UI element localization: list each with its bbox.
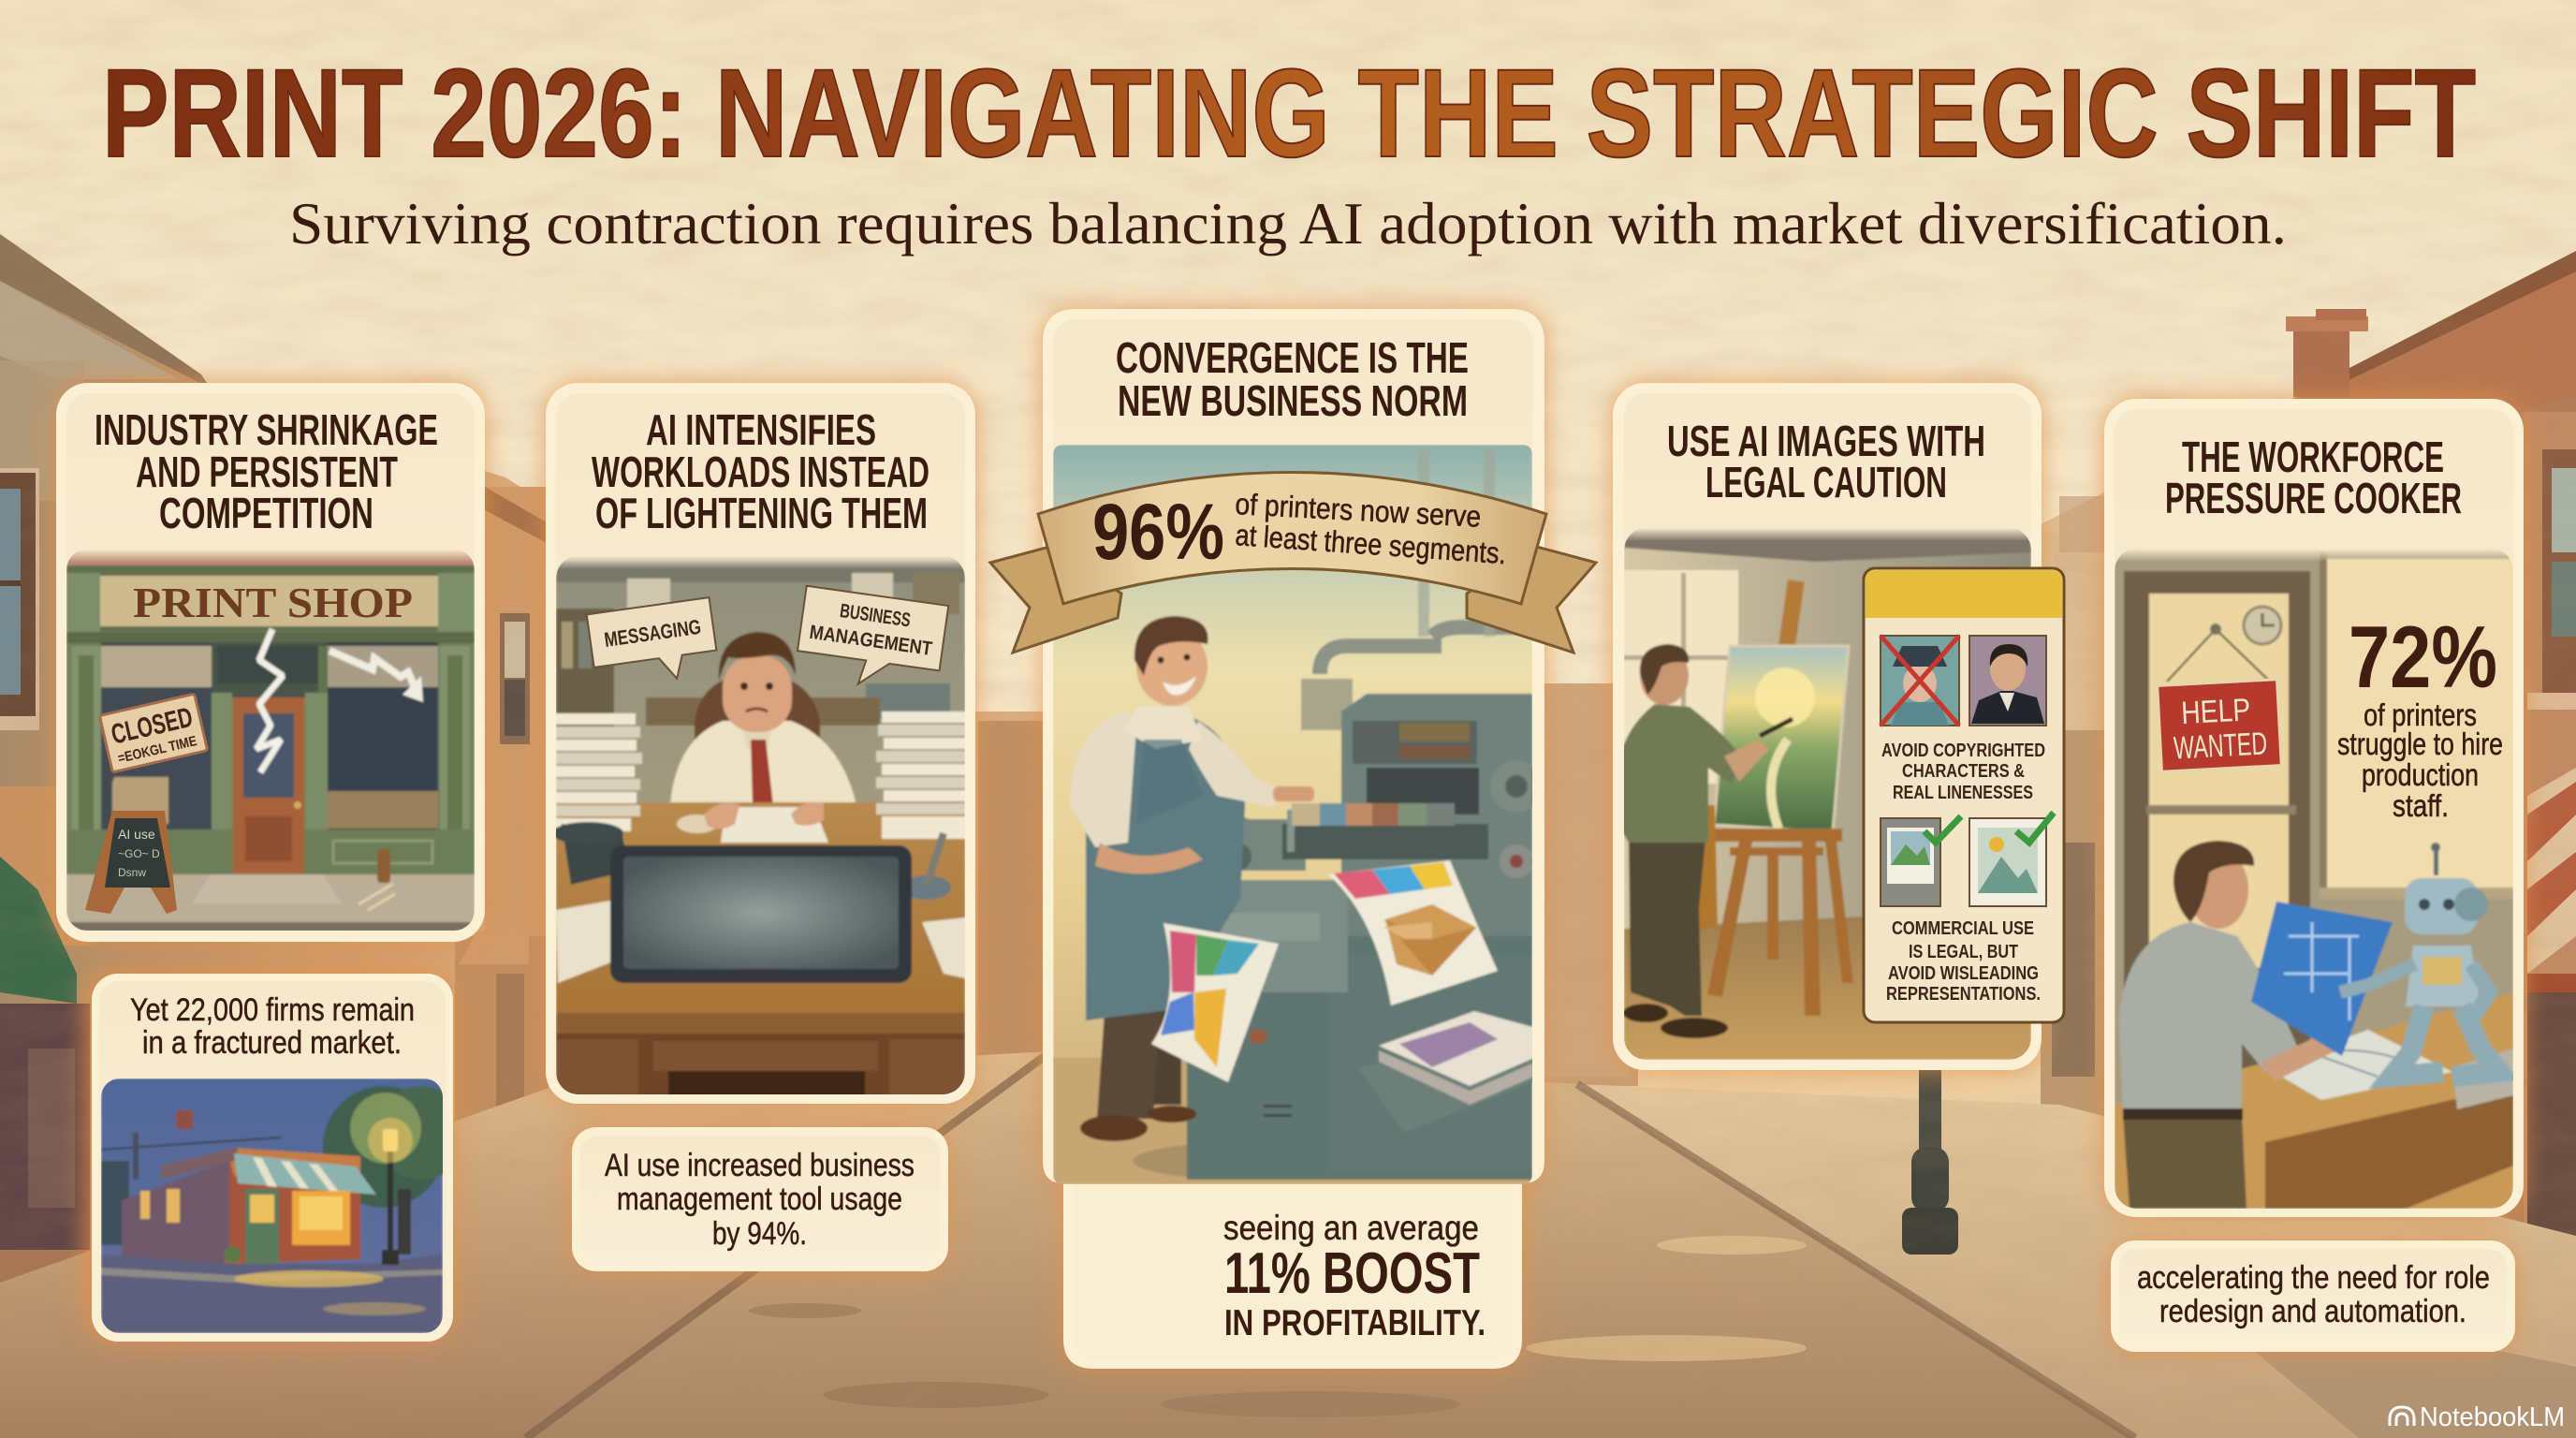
street and sidewalks bbox=[0, 1051, 2576, 1438]
right window and awning bbox=[2527, 449, 2576, 1236]
stat: 72 percent: of printers bbox=[2364, 697, 2477, 732]
card text: Yet 22,000 firms remain bbox=[130, 992, 415, 1028]
banner: 96% statistic bbox=[990, 472, 1596, 653]
panel heading: WORKLOADS INSTEAD bbox=[592, 448, 929, 496]
stat: 72 percent: staff. bbox=[2393, 788, 2449, 823]
sandwich board: AI use bbox=[118, 827, 155, 842]
sign: closed bbox=[99, 694, 208, 772]
illustration: evening storefront bbox=[101, 1078, 468, 1333]
illustration: worker with blueprint and robot bbox=[2115, 549, 2513, 1209]
profitability text: IN PROFITABILITY. bbox=[1224, 1303, 1486, 1343]
panel: legal caution bbox=[1613, 383, 2064, 1070]
panel heading: CONVERGENCE IS THE bbox=[1116, 333, 1469, 382]
right building bbox=[2041, 251, 2576, 1245]
sandwich board: Dsnw bbox=[118, 866, 146, 879]
speech bubble: business management: BUSINESS bbox=[839, 600, 912, 631]
caption: role redesign: accelerating the need for role bbox=[2137, 1260, 2490, 1296]
rules text: avoid bbox=[1881, 741, 2045, 803]
speech bubble: messaging: MESSAGING bbox=[603, 615, 702, 652]
panel: AI intensifies workloads bbox=[546, 383, 975, 1104]
panel heading: AND PERSISTENT bbox=[136, 448, 398, 496]
thumbnail: approved image two bbox=[1969, 813, 2054, 906]
panel heading: USE AI IMAGES WITH bbox=[1667, 417, 1985, 465]
illustration: closed print shop bbox=[66, 550, 475, 932]
banner: 96% statistic: at least three segments. bbox=[1235, 518, 1507, 570]
rules text: commercial: AVOID WISLEADING bbox=[1888, 963, 2039, 984]
NotebookLM logo: NotebookLM bbox=[2420, 1402, 2565, 1432]
rules text: commercial: COMMERCIAL USE bbox=[1892, 918, 2034, 939]
caption: AI business tool usage bbox=[572, 1127, 948, 1271]
left shopfront band bbox=[0, 786, 549, 1353]
speech bubble: business management bbox=[794, 586, 948, 695]
profitability text: seeing an average bbox=[1223, 1209, 1479, 1247]
panel: industry shrinkage bbox=[56, 383, 485, 942]
lamp post bbox=[1902, 1070, 1958, 1255]
panel: workforce pressure cooker bbox=[2104, 399, 2524, 1217]
sign: help wanted bbox=[2158, 680, 2281, 771]
rules text: commercial: REPRESENTATIONS. bbox=[1886, 984, 2041, 1005]
caption: AI business tool usage: AI use increased business bbox=[605, 1148, 915, 1183]
panel heading: COMPETITION bbox=[159, 489, 373, 537]
rules text: avoid: CHARACTERS & bbox=[1902, 761, 2025, 782]
panel heading: NEW BUSINESS NORM bbox=[1118, 376, 1468, 425]
caption: role redesign bbox=[2111, 1240, 2515, 1352]
left window bbox=[0, 468, 39, 730]
rules text: commercial bbox=[1886, 918, 2041, 1005]
illustration: smiling printer with press bbox=[1053, 445, 1582, 1184]
stat: 72 percent: struggle to hire bbox=[2337, 726, 2503, 761]
speech bubble: business management: MANAGEMENT bbox=[808, 622, 933, 660]
speech bubble: messaging bbox=[587, 597, 720, 690]
thumbnail: approved image one bbox=[1881, 816, 1961, 906]
sandwich board bbox=[85, 811, 177, 914]
caption: AI business tool usage: management tool usage bbox=[617, 1181, 902, 1217]
distant buildings bbox=[964, 683, 1638, 1086]
panel heading bbox=[2165, 433, 2462, 522]
panel heading bbox=[1116, 333, 1469, 425]
illustration: painter at easel bbox=[1614, 528, 2031, 1060]
panel: convergence bbox=[990, 309, 1596, 1369]
profitability text: 11% BOOST bbox=[1224, 1241, 1480, 1306]
stat: 72 percent: 72% bbox=[2349, 608, 2497, 706]
sign: closed: CLOSED bbox=[109, 702, 196, 751]
sign: help wanted: HELP bbox=[2180, 692, 2251, 731]
left building bbox=[0, 234, 580, 1376]
stat: 72 percent: production bbox=[2362, 757, 2479, 792]
sandwich board: ~GO~ D bbox=[118, 847, 160, 860]
rules text: avoid: REAL LINENESSES bbox=[1893, 783, 2033, 803]
panel heading: AI INTENSIFIES bbox=[646, 405, 876, 454]
banner: 96% statistic: 96% bbox=[1092, 488, 1224, 576]
panel heading bbox=[1667, 417, 1985, 506]
rules text: avoid: AVOID COPYRIGHTED bbox=[1881, 741, 2045, 761]
thumbnail: real person likeness bbox=[1969, 636, 2046, 726]
subtitle: Surviving contraction requires balancing AI adoption with market diversification. bbox=[289, 190, 2287, 257]
sign: closed: =EOKGL TIME bbox=[116, 733, 198, 767]
rules text: commercial: IS LEGAL, BUT bbox=[1909, 942, 2018, 962]
thumbnail: crossed-out character bbox=[1881, 636, 1959, 726]
note card: usage rules bbox=[1864, 568, 2064, 1022]
panel heading: OF LIGHTENING THEM bbox=[595, 489, 928, 537]
illustration: overworked manager at desk bbox=[552, 556, 965, 1099]
panel heading bbox=[95, 405, 438, 537]
sign: help wanted: WANTED bbox=[2173, 726, 2268, 767]
panel: 22,000 firms bbox=[85, 969, 468, 1343]
sign: print shop: PRINT SHOP bbox=[133, 579, 413, 626]
panel heading: LEGAL CAUTION bbox=[1705, 458, 1947, 506]
caption: AI business tool usage: by 94%. bbox=[712, 1216, 807, 1252]
caption: role redesign: redesign and automation. bbox=[2159, 1294, 2466, 1329]
panel heading: INDUSTRY SHRINKAGE bbox=[95, 405, 438, 454]
card text: in a fractured market. bbox=[142, 1025, 402, 1061]
banner: 96% statistic: of printers now serve bbox=[1235, 487, 1482, 534]
panel heading bbox=[592, 405, 929, 537]
profitability text bbox=[1223, 1209, 1486, 1343]
panel heading: THE WORKFORCE bbox=[2182, 433, 2444, 481]
card text bbox=[130, 992, 415, 1061]
stat: 72 percent bbox=[2337, 608, 2503, 823]
